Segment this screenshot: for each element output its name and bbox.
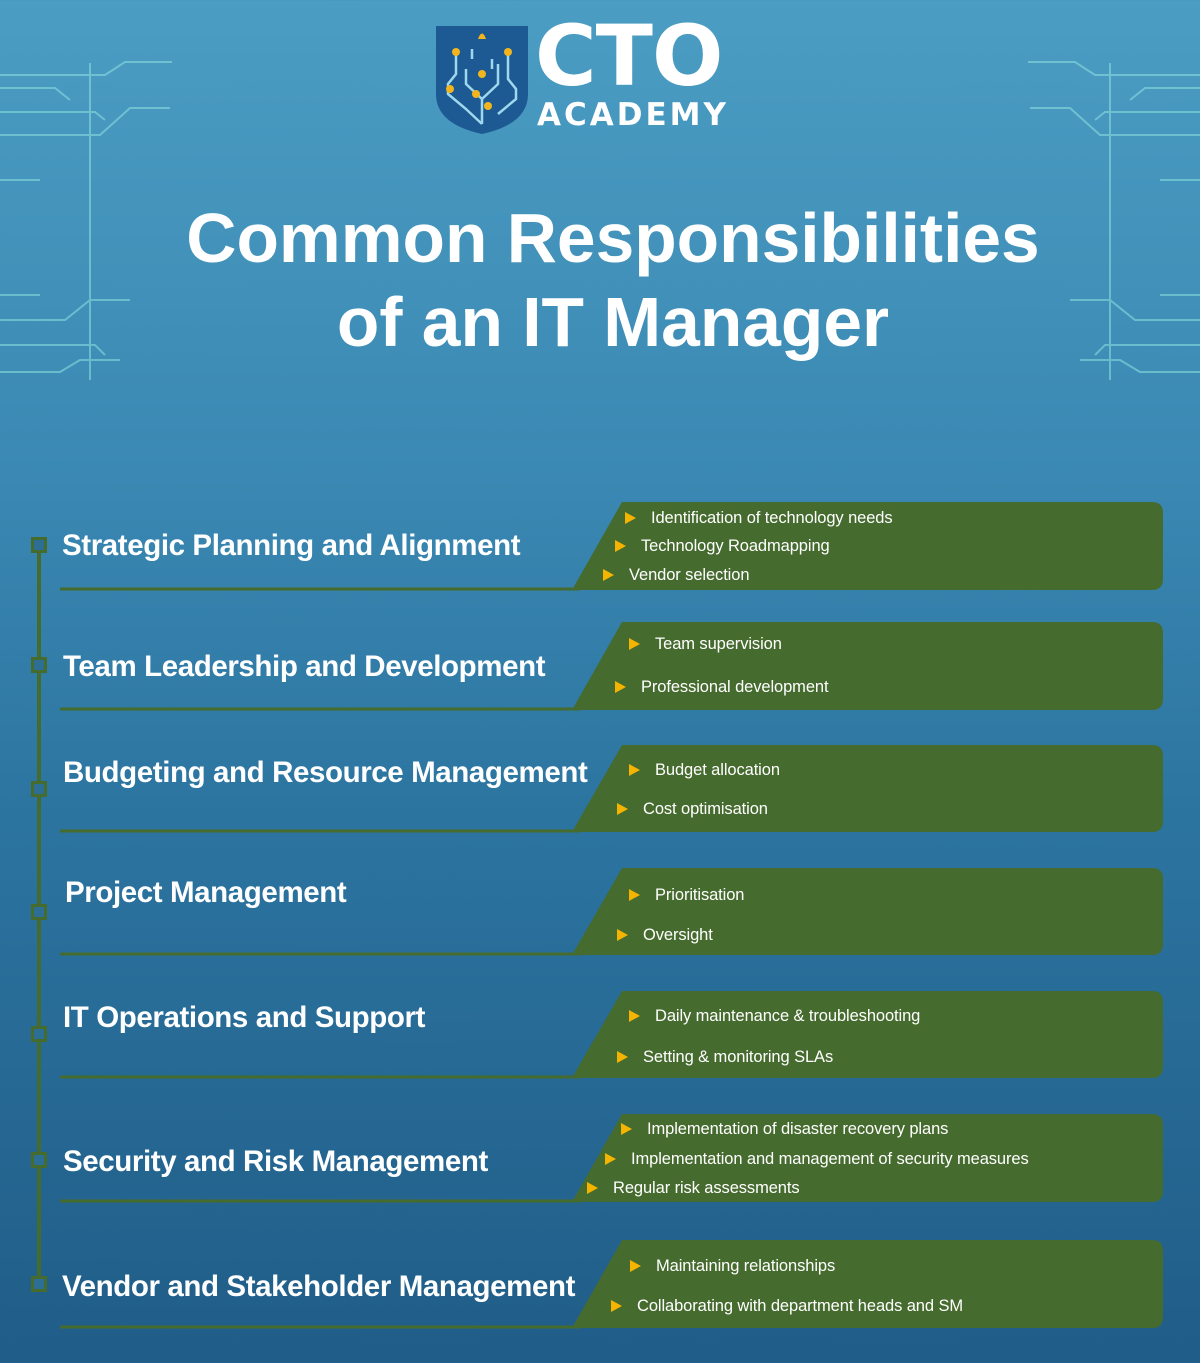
circuit decoration xyxy=(0,61,1200,380)
icon: shield xyxy=(436,26,528,134)
row 4: Project Management xyxy=(65,876,346,909)
row 5: Setting & monitoring SLAs xyxy=(643,1048,833,1066)
row 2 xyxy=(31,635,828,696)
row 3: Cost optimisation xyxy=(643,800,768,818)
row 3 xyxy=(31,756,780,818)
row 6: Implementation and management of security measures xyxy=(631,1150,1029,1168)
title: Common Responsibilities xyxy=(186,199,1040,277)
row 6 xyxy=(31,1120,1029,1197)
row 5: Daily maintenance & troubleshooting xyxy=(655,1007,920,1025)
row 4: Prioritisation xyxy=(655,886,744,904)
row 1: Technology Roadmapping xyxy=(641,537,830,555)
row 6: Implementation of disaster recovery plans xyxy=(647,1120,948,1138)
row 6: Regular risk assessments xyxy=(613,1179,800,1197)
timeline line xyxy=(37,545,41,1285)
row 3: Budget allocation xyxy=(655,761,780,779)
row 5 xyxy=(31,1001,920,1066)
title: of an IT Manager xyxy=(337,283,889,361)
row 7: Collaborating with department heads and SM xyxy=(637,1297,963,1315)
row 2: Professional development xyxy=(641,678,828,696)
logo text: CTO xyxy=(535,7,722,105)
row 1: Strategic Planning and Alignment xyxy=(62,529,520,562)
row 7: Vendor and Stakeholder Management xyxy=(62,1270,575,1303)
row 3: Budgeting and Resource Management xyxy=(63,756,587,789)
row 7 xyxy=(31,1257,963,1315)
row 1: Vendor selection xyxy=(629,566,749,584)
title xyxy=(186,199,1040,361)
row 2: Team supervision xyxy=(655,635,782,653)
row 2: Team Leadership and Development xyxy=(63,650,545,683)
row 4 xyxy=(31,876,744,944)
row 1 xyxy=(31,509,893,584)
logo xyxy=(436,7,729,134)
logo: ACADEMY xyxy=(537,97,729,133)
row 4: Oversight xyxy=(643,926,713,944)
row 6: Security and Risk Management xyxy=(63,1145,488,1178)
row 7: Maintaining relationships xyxy=(656,1257,835,1275)
row 1: Identification of technology needs xyxy=(651,509,893,527)
row 5: IT Operations and Support xyxy=(63,1001,425,1034)
